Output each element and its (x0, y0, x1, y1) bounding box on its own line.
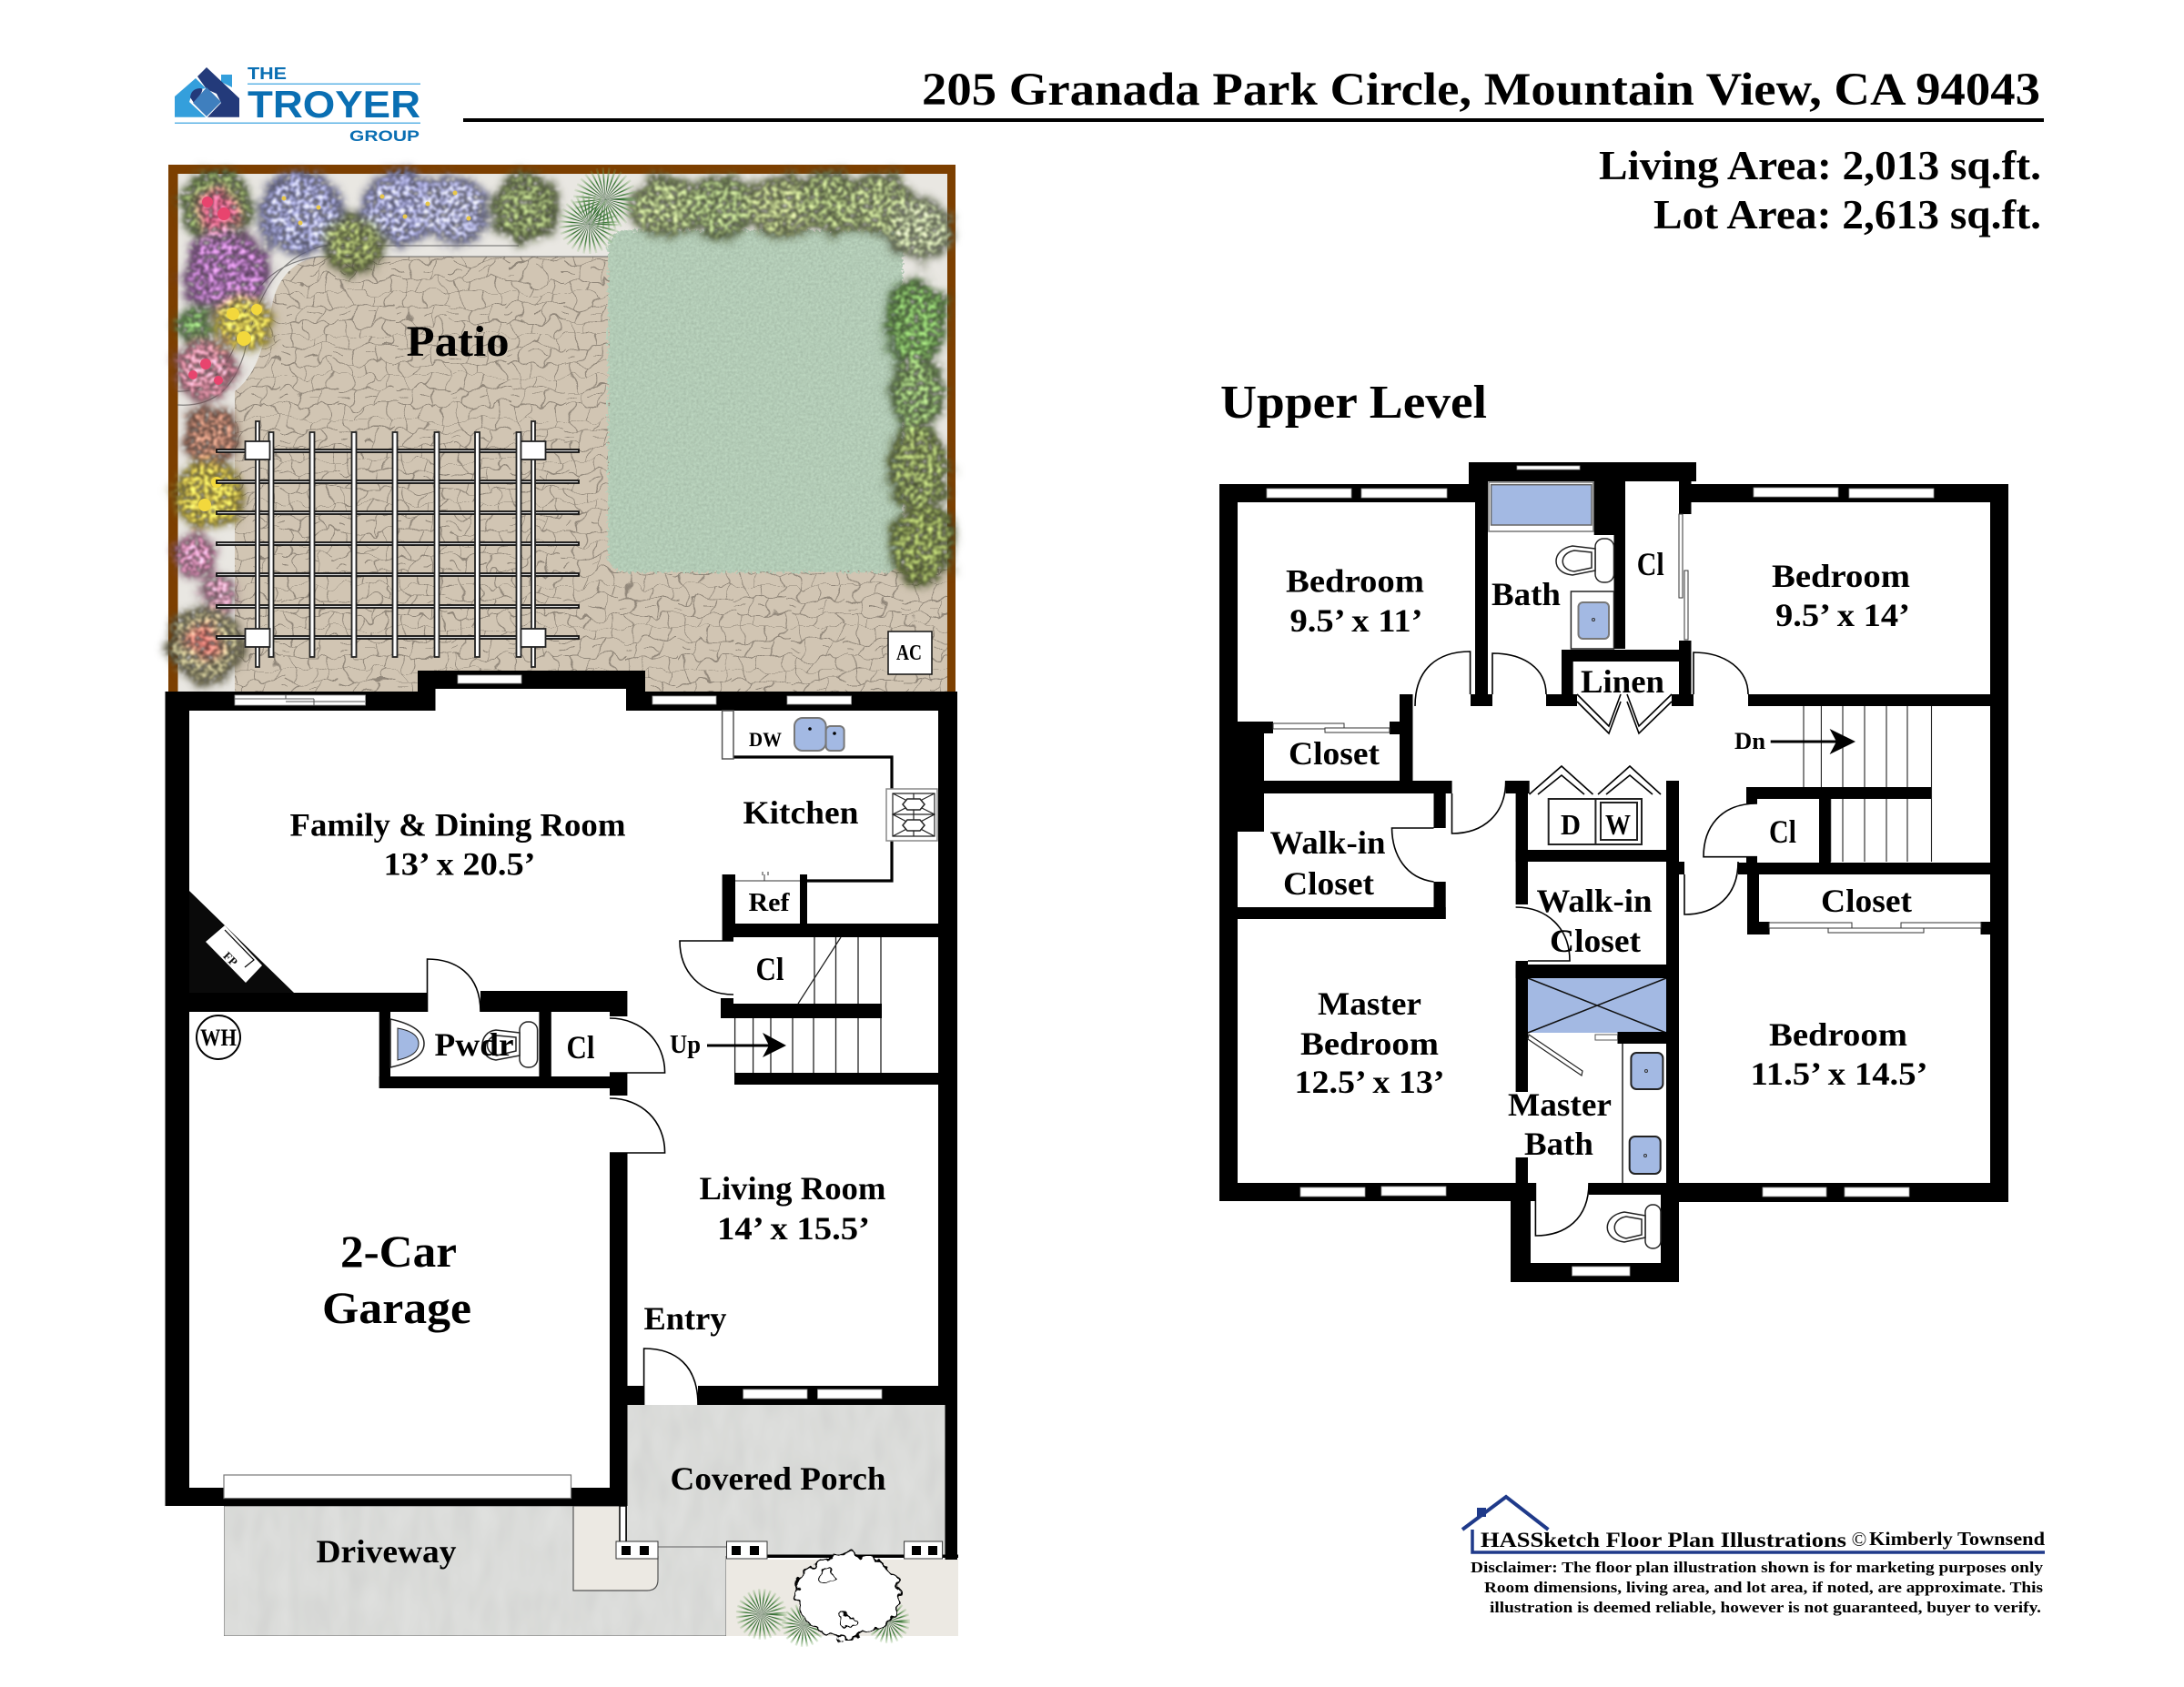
upper room labels: 11.5’ x 14.5’ (1751, 1056, 1927, 1092)
upper room labels: Closet (1289, 735, 1380, 772)
lower level walls (166, 671, 957, 1560)
upper doors (1392, 652, 1757, 1236)
stairs down (1804, 706, 1931, 862)
garage door (224, 1475, 571, 1499)
disclaimer (1471, 1559, 2044, 1616)
upper room labels (1270, 546, 1927, 1162)
upper room labels: W (1605, 808, 1631, 841)
kitchen sink (794, 718, 844, 751)
panel: backyard and patio (164, 165, 974, 710)
upper room labels: Master (1508, 1086, 1612, 1123)
arrow: stairs up (707, 1033, 786, 1057)
patio label: Patio (406, 318, 510, 366)
shower and tub fixtures (1489, 482, 1666, 1033)
front walkway notch (573, 1506, 658, 1591)
front tree canopy (797, 1553, 899, 1637)
heading: upper level: Upper Level (1220, 377, 1487, 429)
powder room toilet (482, 1022, 538, 1067)
yard fence frame (168, 165, 956, 692)
room labels: DW (749, 728, 782, 751)
logo word: TROYER: TROYER (248, 83, 420, 126)
yard ground (178, 174, 947, 692)
stairs (735, 937, 881, 1073)
hall bath sink (1571, 591, 1614, 649)
corner fireplace: FP (220, 949, 240, 969)
room labels: Family & Dining Room (289, 806, 626, 843)
disclaimer: illustration is deemed reliable, however is not guaranteed, buyer to verify. (1490, 1599, 2041, 1616)
covered porch floor (627, 1405, 945, 1556)
logo: The Troyer Group (175, 65, 420, 145)
disclaimer: Disclaimer: The floor plan illustration shown is for marketing purposes only (1471, 1559, 2044, 1576)
disclaimer: Room dimensions, living area, and lot area, if noted, are approximate. This (1484, 1579, 2044, 1596)
lot area: Lot Area: 2,613 sq.ft. (1653, 192, 2041, 237)
bump-out interior (435, 689, 626, 711)
upper level walls (1219, 462, 2008, 1282)
panel: exterior concrete (224, 1405, 958, 1637)
upper room labels: Closet (1550, 923, 1641, 959)
water heater (197, 1015, 240, 1059)
house outline icon (1462, 1497, 2045, 1552)
room labels: Cl (755, 951, 784, 987)
driveway (224, 1506, 726, 1636)
logo icon: house with diamond (175, 67, 239, 117)
panel: lower level floor plan (166, 671, 957, 1570)
kitchen range (886, 789, 937, 841)
lawn (608, 230, 903, 572)
hall bath toilet (1556, 539, 1614, 582)
flower highlights (188, 191, 471, 511)
corner fireplace (189, 891, 294, 993)
patio stone paving (235, 257, 947, 692)
porch columns and rail (616, 1506, 958, 1559)
upper room labels: Master (1318, 985, 1421, 1022)
kitchen counters (723, 711, 892, 881)
upper room labels: Bath (1524, 1126, 1593, 1162)
side yard ground (726, 1560, 958, 1636)
upper room labels: Bedroom (1300, 1025, 1439, 1062)
upper room labels: Closet (1821, 883, 1912, 919)
upper windows (1267, 466, 1934, 1276)
washer and dryer (1549, 799, 1642, 844)
upper room labels: 9.5’ x 11’ (1290, 602, 1423, 639)
planting curb lines (177, 246, 608, 405)
master shower door (1528, 1035, 1618, 1076)
room labels: Up (670, 1031, 701, 1059)
credit line: © (1852, 1528, 1866, 1551)
upper room labels: Bedroom (1772, 558, 1910, 594)
plants and shrubs (169, 170, 954, 682)
living area: Living Area: 2,013 sq.ft. (1599, 143, 2041, 188)
credit: HASSketch logo and disclaimer (1462, 1497, 2045, 1616)
upper room labels: Cl (1769, 813, 1796, 850)
room labels: 2-Car (340, 1226, 457, 1277)
master vanity and sinks (1623, 1044, 1663, 1183)
bathroom fixtures (1528, 539, 1663, 1248)
room labels: Covered Porch (670, 1460, 886, 1497)
title: property address: 205 Granada Park Circle, Mountain View, CA 94043 (922, 65, 2040, 116)
spiky grasses (574, 184, 621, 238)
upper room labels: D (1561, 808, 1581, 841)
AC unit (888, 631, 932, 674)
upper room labels: Closet (1283, 865, 1374, 902)
upper room labels: Bath (1491, 576, 1561, 612)
water heater: WH (200, 1025, 237, 1051)
logo word: THE: THE (248, 65, 287, 83)
sliding closet doors (1273, 514, 1981, 933)
panel: upper level floor plan (1219, 462, 2008, 1282)
upper room labels: Bedroom (1286, 562, 1424, 599)
bifold doors (1529, 694, 1672, 794)
credit line: HASSketch Floor Plan Illustrations (1481, 1529, 1846, 1551)
room labels: Cl (566, 1029, 595, 1066)
credit line: Kimberly Townsend (1869, 1528, 2045, 1550)
pergola (217, 421, 579, 667)
arrow: stairs down (1771, 729, 1855, 754)
room labels: Ref (748, 889, 790, 917)
upper room labels: 12.5’ x 13’ (1294, 1064, 1445, 1100)
upper room labels: Bedroom (1769, 1016, 1907, 1053)
upper room labels: Dn (1734, 728, 1766, 754)
room labels: 13’ x 20.5’ (384, 846, 535, 883)
upper room labels: Cl (1637, 546, 1664, 582)
room labels: 14’ x 15.5’ (717, 1210, 870, 1247)
AC unit: AC (896, 641, 922, 665)
master toilet (1607, 1205, 1661, 1248)
powder room sink (390, 1019, 424, 1067)
room labels: Garage (322, 1282, 471, 1333)
room labels: Living Room (699, 1170, 886, 1207)
credit line (1481, 1528, 2045, 1551)
upper room labels: 9.5’ x 14’ (1775, 597, 1910, 633)
windows and sliding door (235, 675, 882, 1399)
room labels (289, 728, 886, 1570)
room labels: Kitchen (743, 794, 859, 831)
upper room labels: Walk-in (1270, 824, 1385, 861)
front grasses (749, 1601, 899, 1636)
upper room labels: Linen (1581, 663, 1664, 700)
upper room labels: Walk-in (1536, 883, 1653, 919)
logo word: GROUP: GROUP (349, 127, 420, 145)
room labels: Entry (644, 1300, 726, 1337)
room labels: Pwdr (435, 1026, 514, 1063)
doors (428, 941, 733, 1405)
room labels: Driveway (317, 1533, 457, 1570)
